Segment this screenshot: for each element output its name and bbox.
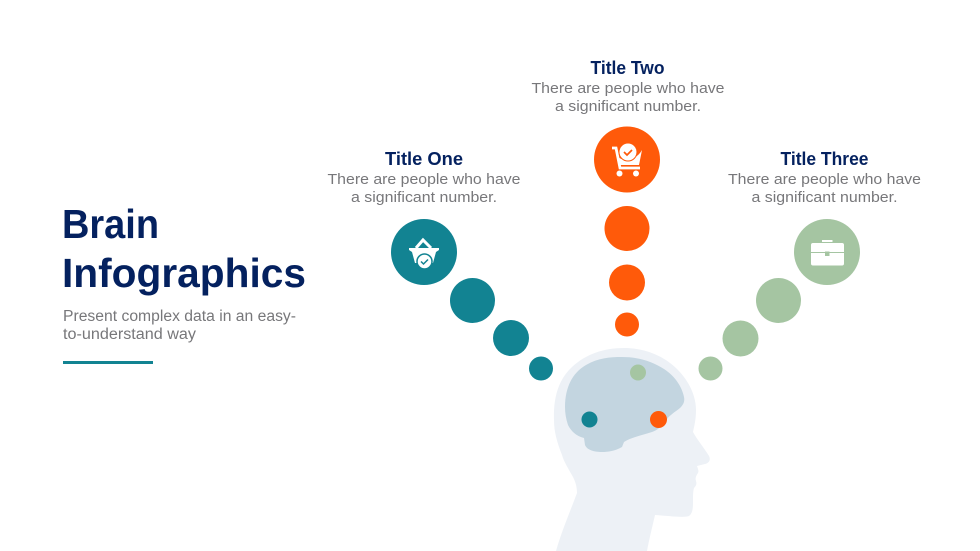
text block: title two [532, 58, 724, 115]
icon: briefcase [811, 240, 844, 266]
head silhouette [554, 348, 710, 551]
accent rule [63, 361, 153, 364]
brain [565, 357, 684, 452]
circle: title three with briefcase icon [794, 219, 860, 285]
text block: title three: There are people who have [728, 171, 921, 188]
circle: title one with basket icon [391, 219, 457, 285]
circle: title two with cart icon [594, 126, 660, 192]
text block: title two: a significant number. [555, 98, 701, 115]
text block: title one: a significant number. [351, 189, 497, 206]
subtitle [63, 308, 296, 343]
text block: title one: Title One [385, 149, 463, 169]
text block: title two: Title Two [590, 58, 664, 78]
icon: shopping cart with check [612, 143, 642, 176]
text block: title three: Title Three [780, 149, 868, 169]
text block: title three: a significant number. [752, 189, 898, 206]
title [62, 201, 306, 296]
text block: title three [728, 149, 921, 206]
text block: title one: There are people who have [328, 171, 520, 188]
text block: title one [328, 149, 520, 206]
brain node: green [630, 364, 646, 380]
subtitle: Present complex data in an easy- [63, 308, 296, 325]
branch two: orange dots [604, 206, 650, 336]
title: Infographics [62, 250, 306, 296]
branch one: teal dots [450, 278, 553, 380]
subtitle: to-understand way [63, 326, 196, 343]
text block: title two: There are people who have [532, 80, 724, 97]
title: Brain [62, 201, 159, 247]
branch three: green dots [698, 278, 801, 380]
icon: basket with check [409, 240, 439, 269]
brain node: teal [582, 412, 598, 428]
brain node: orange [650, 411, 667, 428]
